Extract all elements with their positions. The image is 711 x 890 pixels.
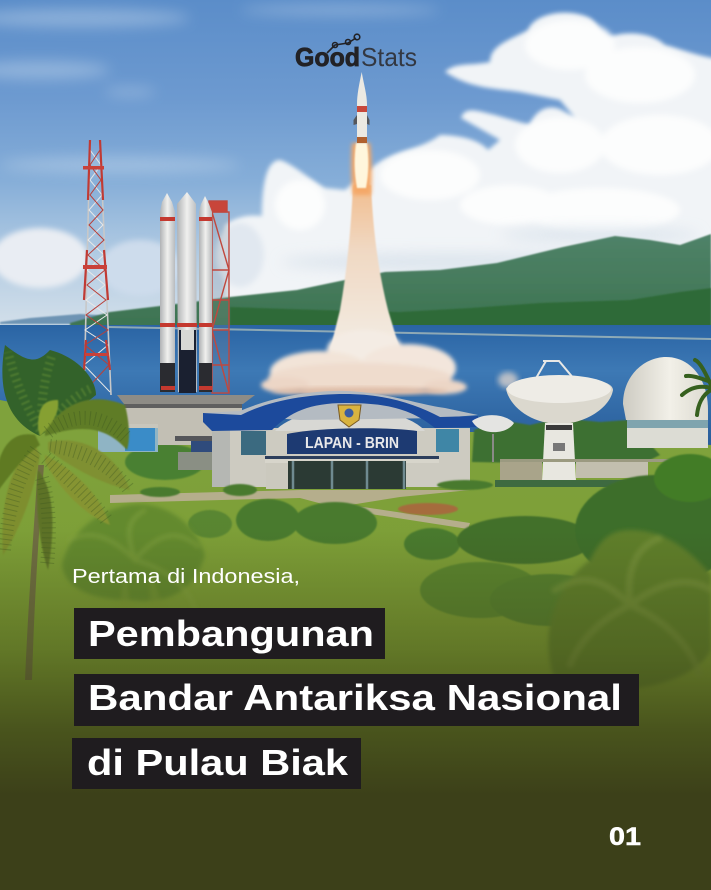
emblem xyxy=(338,405,361,427)
logo chart line icon xyxy=(327,34,360,53)
wispy clouds upper left xyxy=(0,5,440,173)
hedges and shrubs xyxy=(140,454,711,626)
canopy beam xyxy=(265,456,439,459)
lower palm right xyxy=(548,530,711,690)
page number: 01 xyxy=(609,823,641,851)
small annex blocks xyxy=(175,436,213,470)
lattice tower xyxy=(83,140,111,395)
gable xyxy=(275,409,425,431)
sign LAPAN - BRIN: LAPAN - BRIN xyxy=(305,435,399,452)
sign LAPAN - BRIN xyxy=(287,428,417,454)
crown dark mass xyxy=(2,345,96,436)
main building LAPAN - BRIN xyxy=(203,391,478,489)
mountains xyxy=(0,234,711,340)
main palm tree left xyxy=(0,345,130,680)
ground station low building xyxy=(495,459,670,487)
intro text: Pertama di Indonesia, xyxy=(72,565,300,588)
GoodStats logo: Stats xyxy=(361,42,417,72)
blue roof band xyxy=(203,394,478,431)
palm top right xyxy=(682,360,711,415)
title line 1: Pembangunan xyxy=(88,613,374,654)
title line 2: Bandar Antariksa Nasional xyxy=(88,677,622,718)
grass ground xyxy=(0,400,711,890)
driveway xyxy=(110,490,470,529)
rocket xyxy=(354,72,370,143)
walls xyxy=(212,428,470,487)
title line 2 xyxy=(74,674,639,726)
roof top xyxy=(203,391,478,420)
small satellite dish xyxy=(472,415,514,462)
clouds left horizon xyxy=(0,223,264,296)
sky background xyxy=(0,0,711,330)
treeline behind buildings xyxy=(125,418,660,480)
dark olive fade overlay xyxy=(0,530,711,795)
launch gantry xyxy=(160,192,229,393)
lower palm left xyxy=(62,504,205,640)
launch platform building xyxy=(90,395,255,452)
rocket exhaust plume xyxy=(261,143,518,395)
sea xyxy=(0,325,711,445)
title line 3: di Pulau Biak xyxy=(87,742,349,783)
GoodStats logo: Good xyxy=(295,42,360,72)
GoodStats logo xyxy=(295,34,417,72)
entrance glass xyxy=(288,461,406,489)
large satellite dish xyxy=(506,361,613,481)
red service tower xyxy=(209,201,229,393)
title line 3 xyxy=(72,738,361,789)
fronds xyxy=(0,399,130,570)
dome radome xyxy=(623,357,708,448)
cumulus clouds right xyxy=(225,13,711,302)
window panels xyxy=(241,431,266,455)
rocket columns xyxy=(160,193,175,392)
title line 1 xyxy=(74,608,385,659)
